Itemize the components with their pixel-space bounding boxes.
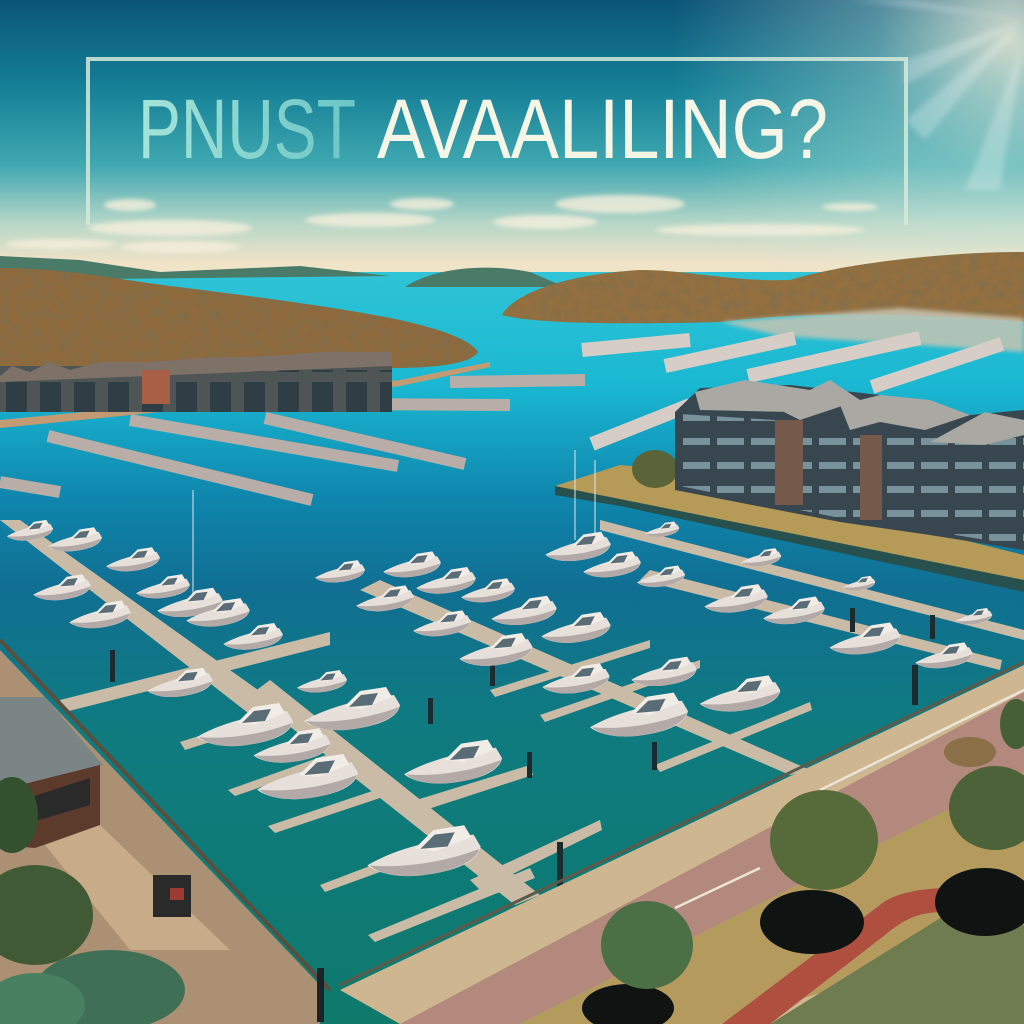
- right waterfront lawn: [555, 465, 1024, 590]
- mooring posts: [110, 608, 935, 892]
- yachts: foreground group: [147, 657, 780, 876]
- distant marinas: far right rows: [582, 338, 1002, 444]
- utility box: [153, 875, 191, 917]
- paving highlight: [45, 825, 230, 950]
- yachts: right pier group: [545, 521, 992, 668]
- quay wall: [555, 486, 1024, 592]
- title frame: [88, 59, 906, 225]
- tree shadows: [582, 868, 1024, 1024]
- forest: left headland: [0, 268, 478, 372]
- distant marinas: left rows: [0, 380, 585, 500]
- red footpath: [722, 888, 950, 1024]
- sky background: [0, 0, 1024, 285]
- distant hills: [0, 256, 565, 287]
- waterfront office building: [0, 697, 103, 848]
- left shore strip: [0, 362, 490, 428]
- clouds: [5, 195, 878, 253]
- right apartment buildings: [675, 380, 1024, 550]
- bottom-left pavement: [0, 650, 320, 1024]
- parkside trees: [601, 699, 1024, 989]
- foreground pontoons: [0, 520, 1024, 942]
- bottom-left trees: [0, 777, 185, 1024]
- yachts: left pier group: [7, 520, 283, 650]
- hazy far buildings: [720, 308, 1024, 352]
- title: PNUST: [138, 82, 356, 176]
- sun glow and rays: [0, 0, 1024, 300]
- tree near apartments: [632, 450, 678, 488]
- road lines: [675, 690, 1024, 908]
- water: [0, 272, 1024, 1024]
- forest: right headland: [502, 252, 1024, 323]
- yachts: centre pier group: [315, 551, 611, 666]
- sailboat masts: [193, 450, 595, 600]
- title: [138, 82, 828, 176]
- promenade fence: [340, 662, 1024, 985]
- promenade and grass: [340, 665, 1024, 1024]
- shore edge: [0, 640, 330, 990]
- title: AVAALILING?: [377, 82, 828, 176]
- left townhouses: [0, 352, 392, 412]
- lamp post: [317, 968, 324, 1022]
